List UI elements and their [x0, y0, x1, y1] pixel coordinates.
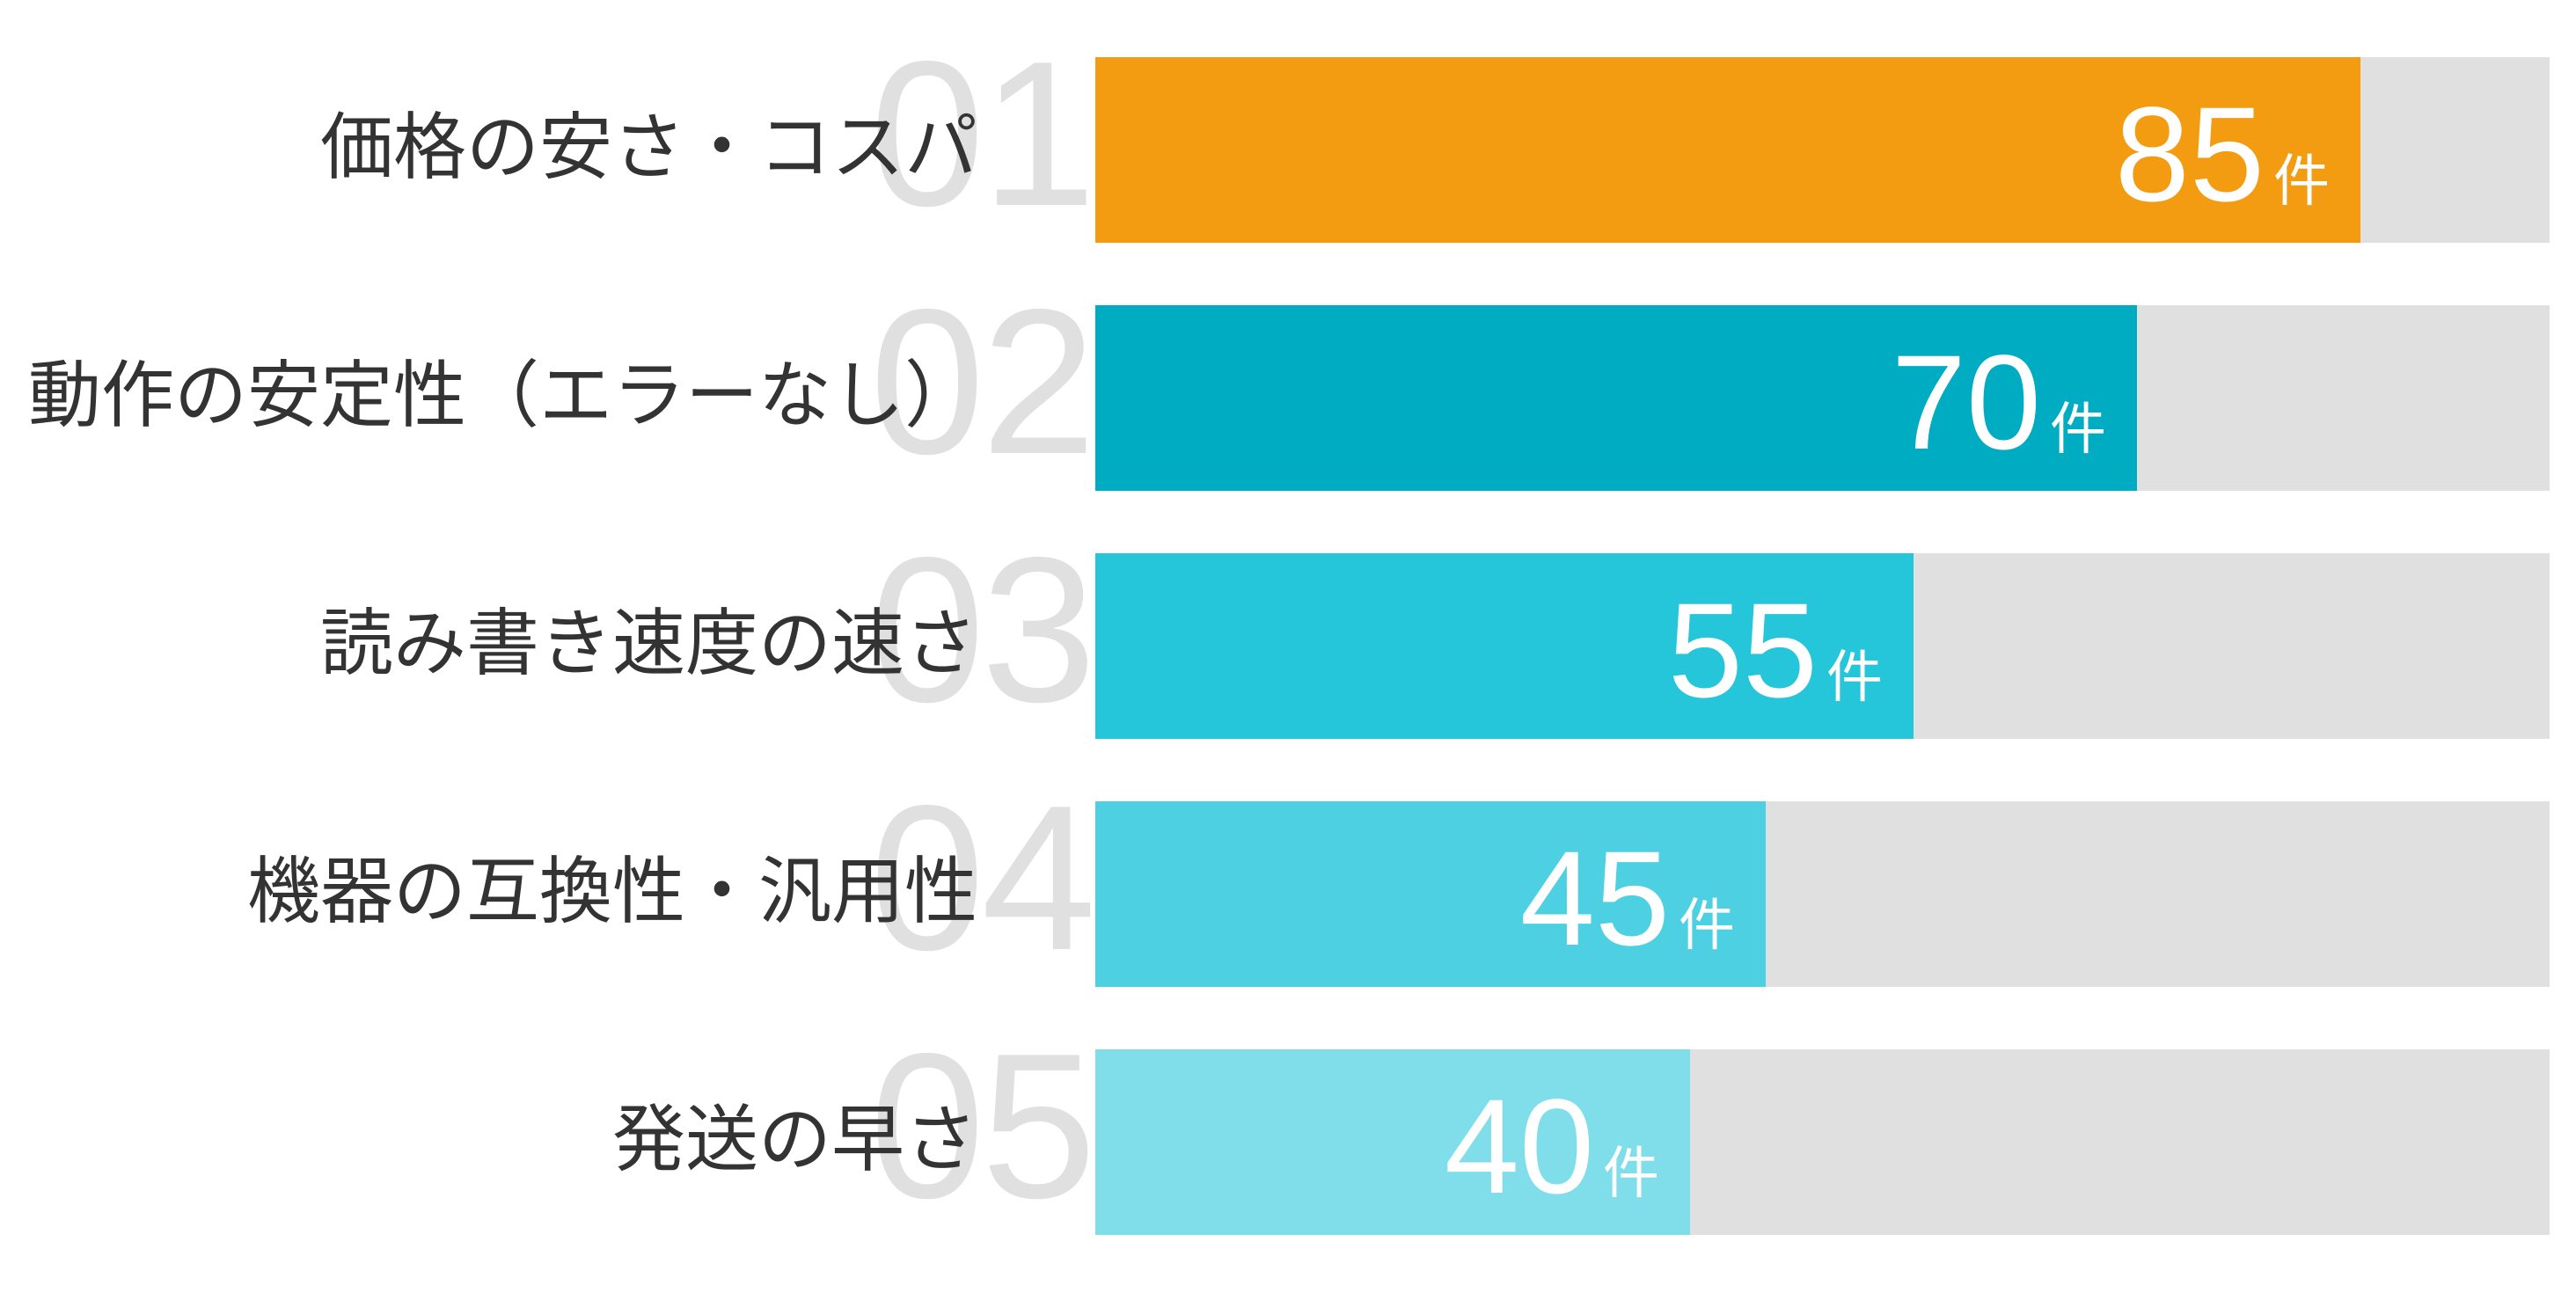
value 70件: 70件 [1892, 327, 2106, 478]
bar fill 85 [1095, 57, 2360, 243]
bar fill 70 [1095, 305, 2137, 491]
label: shipping: 発送の早さ [612, 1098, 977, 1180]
label: speed: 読み書き速度の速さ [320, 602, 977, 684]
value 40件: 40件 [1445, 1071, 1659, 1222]
bar track 2 [1095, 305, 2550, 491]
rank number 01: 01 [870, 18, 1093, 249]
rank number 05: 05 [870, 1010, 1093, 1241]
bar fill 55 [1095, 553, 1914, 739]
value 85件: 85件 [2115, 79, 2330, 230]
row 3: speed [320, 514, 2550, 745]
label: compatibility: 機器の互換性・汎用性 [247, 850, 977, 932]
row 2: stability [28, 266, 2550, 497]
row 4: compatibility [247, 762, 2550, 993]
bar track 5 [1095, 1049, 2550, 1235]
row 1: price [320, 18, 2550, 249]
bar track 3 [1095, 553, 2550, 739]
value 55件: 55件 [1668, 575, 1883, 726]
bar fill 40 [1095, 1049, 1690, 1235]
row 5: shipping [612, 1010, 2550, 1241]
rank number 04: 04 [870, 762, 1093, 993]
label: stability: 動作の安定性（エラーなし） [28, 354, 977, 436]
label: price: 価格の安さ・コスパ [320, 106, 977, 188]
bar track 1 [1095, 57, 2550, 243]
bar fill 45 [1095, 801, 1766, 987]
value 45件: 45件 [1520, 823, 1735, 974]
bar track 4 [1095, 801, 2550, 987]
rank number 03: 03 [870, 514, 1093, 745]
rank number 02: 02 [870, 266, 1093, 497]
